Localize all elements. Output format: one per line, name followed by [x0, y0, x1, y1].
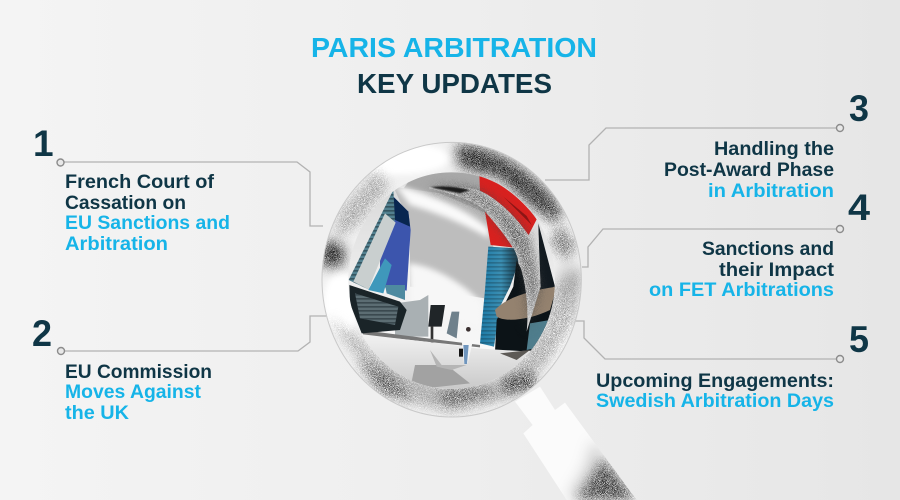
item 4	[649, 187, 870, 301]
item 2: the UK	[65, 403, 129, 424]
right tower	[480, 247, 518, 347]
item 4: on FET Arbitrations	[649, 280, 834, 301]
item 2: Moves Against	[65, 382, 202, 403]
title	[311, 32, 597, 99]
ring shading	[323, 145, 580, 402]
skyline	[362, 295, 480, 348]
connector 5	[572, 321, 844, 362]
number 4: 4	[848, 187, 870, 228]
dark right	[495, 260, 557, 352]
ring sweep over lens	[429, 186, 541, 332]
lens photo	[348, 172, 555, 389]
flag blue	[380, 195, 411, 291]
item 3	[664, 88, 869, 202]
number 2: 2	[32, 313, 52, 354]
number 5: 5	[849, 319, 869, 360]
number 3: 3	[849, 88, 869, 129]
item 2: EU Commission	[65, 362, 212, 383]
saucer	[495, 287, 557, 320]
item 3: Handling the	[714, 139, 834, 160]
item 1: French Court of	[65, 172, 215, 193]
glass ring	[322, 142, 582, 417]
connector 2	[58, 316, 327, 354]
person	[459, 327, 472, 364]
number 1: 1	[33, 123, 54, 164]
low buildings	[349, 285, 407, 333]
item 3: in Arbitration	[708, 181, 834, 202]
connector 3	[545, 124, 844, 180]
left towers	[349, 190, 395, 289]
ring outline	[322, 142, 581, 417]
ring texture	[323, 145, 580, 413]
item 5: Swedish Arbitration Days	[596, 391, 834, 412]
item 1: EU Sanctions and	[65, 213, 230, 234]
item 2	[32, 313, 212, 424]
item 5	[596, 319, 869, 412]
item 1: Cassation on	[65, 193, 186, 214]
street	[363, 334, 530, 389]
item 4: Sanctions and	[702, 239, 834, 260]
handle	[515, 387, 636, 500]
item 1: Arbitration	[65, 234, 168, 255]
magnifying glass	[322, 142, 650, 500]
flag	[395, 172, 494, 298]
title: PARIS ARBITRATION	[311, 32, 597, 63]
connector 4	[582, 226, 844, 267]
item 3: Post-Award Phase	[664, 160, 834, 181]
flag red	[479, 175, 537, 236]
item 1	[33, 123, 230, 255]
title: KEY UPDATES	[357, 68, 552, 99]
item 4: their Impact	[719, 260, 835, 281]
connector 1	[57, 159, 323, 226]
item 5: Upcoming Engagements:	[596, 371, 834, 392]
